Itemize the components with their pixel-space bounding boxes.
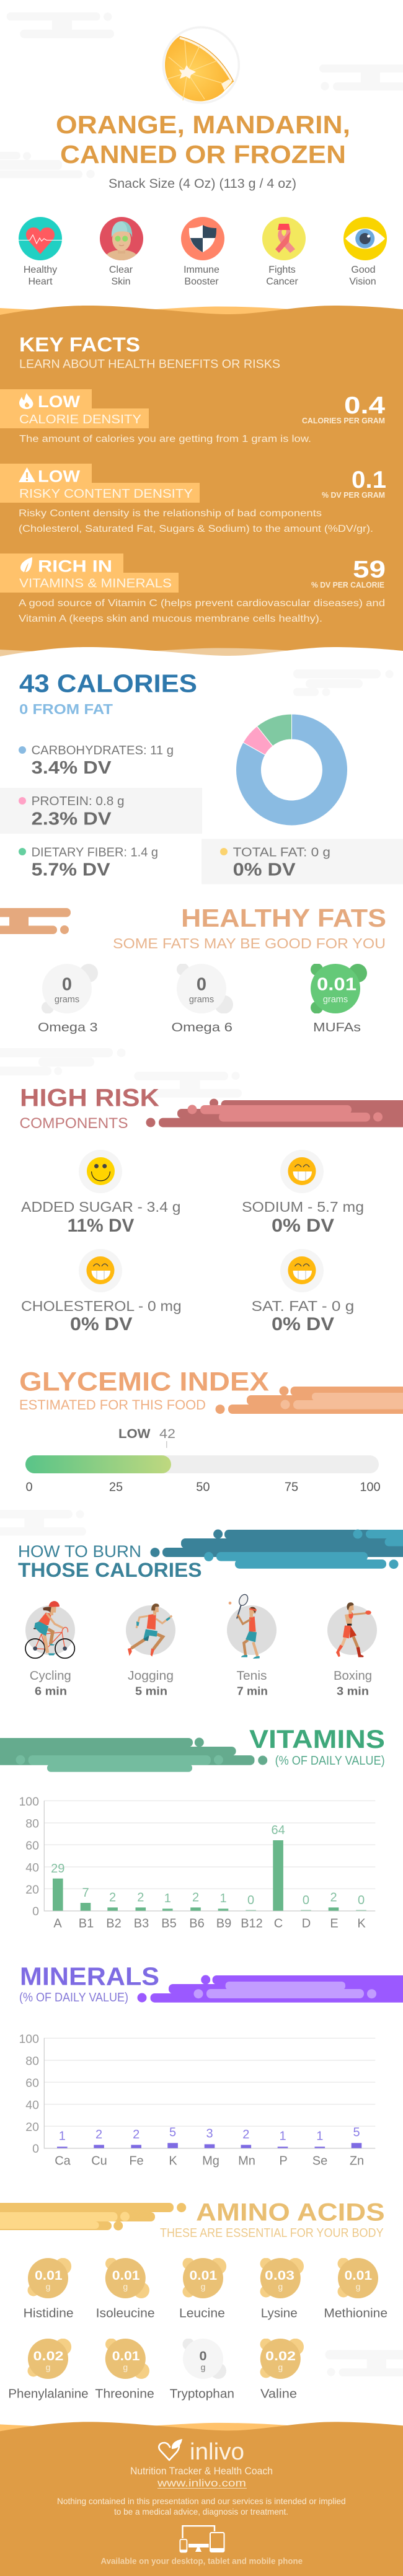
- chart: minerals bar chart: Se: [312, 2155, 327, 2168]
- icon: leaf: [20, 557, 32, 572]
- description: vitamins and minerals: A good source of Vitamin C (helps prevent cardiovascular diseases) and: [19, 598, 385, 609]
- risk item: cholesterol: [21, 1249, 182, 1334]
- amino acid: valine: 0.02: [265, 2349, 296, 2363]
- bubble: omega 6: grams: [189, 995, 214, 1005]
- metric: 0.1 % dv per gram: % DV PER GRAM: [322, 491, 385, 500]
- hero: orange slice image: [163, 27, 239, 103]
- chart: vitamins bar chart: B12: [241, 1917, 263, 1930]
- amino acid: threonine: 0.01: [112, 2349, 140, 2363]
- decorative band: amino acids: [0, 2203, 186, 2230]
- decorative band: burn: [150, 1530, 403, 1569]
- decorative band: minerals: [138, 1975, 403, 2003]
- chart: minerals bar chart: 60: [25, 2076, 39, 2090]
- chart: minerals bar chart: 0: [32, 2142, 39, 2156]
- fact: rich in vitamins and minerals: [0, 554, 386, 624]
- amino acid: lysine: g: [278, 2282, 283, 2291]
- exercise: cycling: [25, 1601, 75, 1698]
- amino acid: isoleucine: 0.01: [112, 2268, 140, 2283]
- amino acid: histidine: [27, 2258, 71, 2298]
- risk item: sodium: 0% DV: [272, 1215, 334, 1236]
- icon: good vision: [343, 217, 387, 260]
- exercise: jogging: [126, 1603, 175, 1698]
- chart: vitamins bar chart: B1: [79, 1917, 94, 1930]
- chart: vitamins bar chart: 80: [25, 1817, 39, 1831]
- icon: immune booster: [181, 217, 224, 260]
- chart: minerals bar chart: 80: [25, 2054, 39, 2068]
- amino acid: tryptophan: [182, 2338, 226, 2379]
- amino acid: histidine: g: [46, 2282, 50, 2291]
- decorative band: glycemic: [216, 1386, 403, 1414]
- metric: 59 % dv per calorie: % DV PER CALORIE: [311, 581, 384, 589]
- legend: protein: [0, 788, 202, 834]
- logo: inlivo heart and wordmark: inlivo: [190, 2439, 244, 2465]
- chart: minerals bar chart: P: [279, 2155, 288, 2168]
- chart: macronutrient donut: [236, 714, 347, 826]
- title: CANNED OR FROZEN: [60, 140, 346, 169]
- gauge bar: [25, 1455, 379, 1473]
- metric: 0.4 calories per gram: [302, 392, 385, 425]
- rating: rich in: RICH IN: [38, 557, 112, 575]
- legend: dietary fiber: 5.7% DV: [32, 860, 110, 880]
- chart: vitamins bar chart: B2: [106, 1917, 122, 1930]
- label: calorie density: CALORIE DENSITY: [19, 412, 141, 426]
- chart: minerals bar chart: 20: [25, 2120, 39, 2134]
- chart: minerals bar chart: Ca: [55, 2155, 71, 2168]
- amino acid: valine: g: [278, 2362, 283, 2372]
- label: good vision: Good: [351, 265, 376, 275]
- chart: vitamins bar chart: 20: [25, 1883, 39, 1897]
- benefits row: [19, 217, 387, 287]
- metric: 0.4 calories per gram: CALORIES PER GRAM: [302, 417, 385, 425]
- panel: glycemic index: [19, 1367, 403, 1494]
- chart: minerals bar chart: 1: [279, 2130, 286, 2143]
- metric: 59 % dv per calorie: [311, 556, 386, 589]
- description: risky content density: (Cholesterol, Saturated Fat, Sugars & Sodium) to the amount (%DV/gr).: [19, 524, 373, 534]
- bubble: omega 3: grams: [55, 995, 79, 1005]
- exercise: boxing: Boxing: [334, 1669, 372, 1683]
- chart: vitamins bar chart: 1: [164, 1892, 171, 1905]
- amino acid: phenylalanine: 0.02: [33, 2349, 64, 2363]
- chart: vitamins bar chart: 64: [271, 1824, 285, 1837]
- chart: vitamins bar chart: 40: [25, 1861, 39, 1874]
- risk item: sodium: [242, 1150, 364, 1236]
- panel: minerals: [19, 1962, 403, 2168]
- title: ORANGE, MANDARIN,: [56, 110, 350, 139]
- legend: total fat: TOTAL FAT: 0 g: [233, 845, 330, 859]
- chart: vitamins bar chart: K: [357, 1917, 366, 1930]
- description: vitamins and minerals: [19, 598, 385, 624]
- bubble: omega 6: [171, 963, 233, 1034]
- chart: minerals bar chart: Cu: [91, 2155, 107, 2168]
- chart: vitamins bar chart: 2: [192, 1891, 199, 1905]
- legend: protein: PROTEIN: 0.8 g: [32, 795, 125, 808]
- amino acid: leucine: [182, 2257, 226, 2298]
- chart: minerals bar chart: 5: [169, 2126, 176, 2140]
- amino acid: isoleucine: g: [123, 2282, 128, 2291]
- exercise: tennis: Tenis: [237, 1669, 267, 1683]
- legend: protein: 2.3% DV: [32, 809, 112, 829]
- chart: vitamins bar chart: 0: [358, 1894, 365, 1907]
- chart: vitamins bar chart: [19, 1795, 375, 1930]
- chart: minerals bar chart: 5: [353, 2126, 360, 2140]
- amino acid: lysine: [260, 2257, 304, 2298]
- description: calorie density: The amount of calories you are getting from 1 gram is low.: [19, 434, 311, 444]
- heading: healthy fats: HEALTHY FATS: [181, 904, 386, 932]
- amino acid: lysine: 0.03: [265, 2268, 294, 2283]
- tagline: Nutrition Tracker & Health Coach: [130, 2466, 273, 2477]
- bubble: omega 3: [38, 964, 98, 1034]
- risk item: cholesterol: CHOLESTEROL - 0 mg: [21, 1298, 182, 1314]
- amino acid: valine: [260, 2338, 304, 2379]
- chart: vitamins bar chart: C: [274, 1917, 283, 1930]
- chart: vitamins bar chart: 1: [219, 1892, 227, 1905]
- panel: vitamins: [0, 1724, 385, 1930]
- gauge scale: 100: [360, 1481, 381, 1494]
- exercise: boxing: 3 min: [337, 1685, 369, 1698]
- label: healthy heart: Healthy: [24, 265, 57, 275]
- legend: total fat: 0% DV: [233, 860, 296, 880]
- legend: dietary fiber: [19, 845, 158, 880]
- icon: healthy heart: [19, 217, 62, 260]
- chart: vitamins bar chart: D: [302, 1917, 311, 1930]
- label: histidine: Histidine: [24, 2306, 74, 2320]
- risk item: sodium: SODIUM - 5.7 mg: [242, 1199, 364, 1215]
- subheading: vitamins: (% OF DAILY VALUE): [275, 1754, 385, 1768]
- fact: calorie density: [0, 389, 385, 444]
- chart: minerals bar chart: Fe: [129, 2155, 144, 2168]
- metric: 0.1 % dv per gram: [322, 467, 386, 500]
- serving size subtitle: Snack Size (4 Oz) (113 g / 4 oz): [108, 177, 296, 191]
- amino acid: isoleucine: [105, 2257, 149, 2298]
- background clouds: header: [0, 12, 403, 179]
- decorative band: high risk: [146, 1099, 403, 1127]
- gauge value: low 42: [118, 1427, 175, 1448]
- bubble: mufas: MUFAs: [313, 1020, 361, 1034]
- chart: vitamins bar chart: A: [53, 1917, 62, 1930]
- icon: warning: [19, 467, 35, 482]
- chart: minerals bar chart: 2: [95, 2128, 102, 2142]
- panel: key facts: [0, 306, 403, 659]
- rating: low: LOW: [38, 467, 81, 486]
- bubble: mufas: [311, 963, 367, 1034]
- legend: carbohydrates: 3.4% DV: [32, 758, 112, 778]
- chart: vitamins bar chart: 100: [19, 1795, 39, 1809]
- fact: risky content density: [0, 464, 386, 534]
- chart: minerals bar chart: Mn: [238, 2155, 255, 2168]
- label: phenylalanine: Phenylalanine: [8, 2388, 89, 2401]
- rating: low: LOW: [38, 392, 81, 411]
- chart: vitamins bar chart: 2: [109, 1891, 116, 1905]
- exercise: boxing: [327, 1602, 377, 1698]
- label: methionine: Methionine: [324, 2306, 388, 2320]
- chart: vitamins bar chart: 2: [330, 1891, 337, 1905]
- heading: minerals: MINERALS: [20, 1962, 159, 1991]
- gauge scale: 50: [196, 1481, 210, 1494]
- amino acid: leucine: 0.01: [190, 2268, 217, 2283]
- label: lysine: Lysine: [261, 2306, 298, 2320]
- chart: vitamins bar chart: 60: [25, 1839, 39, 1853]
- amino acid: methionine: g: [356, 2282, 360, 2291]
- subheading: healthy fats: SOME FATS MAY BE GOOD FOR YOU: [113, 935, 386, 951]
- heading: high risk: HIGH RISK: [20, 1084, 159, 1111]
- exercise: tennis: 7 min: [237, 1685, 268, 1698]
- amino acid: threonine: g: [123, 2362, 128, 2372]
- label: valine: Valine: [260, 2388, 297, 2401]
- chart: minerals bar chart: K: [169, 2155, 177, 2168]
- chart: vitamins bar chart: 0: [32, 1905, 39, 1918]
- label: threonine: Threonine: [95, 2388, 154, 2401]
- gauge scale: 75: [285, 1481, 298, 1494]
- panel: high risk components: [0, 1048, 403, 1334]
- icon: fights cancer: [262, 217, 306, 260]
- legend: carbohydrates: CARBOHYDRATES: 11 g: [32, 744, 174, 757]
- decorative band: healthy fats: [0, 908, 71, 934]
- amino acid: tryptophan: g: [201, 2362, 205, 2372]
- chart: vitamins bar chart: 7: [82, 1886, 89, 1900]
- subheading: 0 from fat: 0 FROM FAT: [19, 701, 113, 717]
- heading: vitamins: VITAMINS: [249, 1724, 385, 1753]
- chart: minerals bar chart: 1: [316, 2130, 323, 2143]
- legend: total fat: [202, 839, 403, 884]
- bubble: mufas: grams: [323, 995, 348, 1005]
- label: risky content density: RISKY CONTENT DENSITY: [19, 487, 193, 501]
- label: isoleucine: Isoleucine: [96, 2306, 155, 2320]
- label: vitamins and minerals: VITAMINS & MINERALS: [19, 576, 172, 590]
- label: good vision: Vision: [349, 276, 376, 287]
- gauge value: low 42: 42: [159, 1427, 175, 1441]
- chart: vitamins bar chart: B3: [134, 1917, 149, 1930]
- description: risky content density: Risky Content density is the relationship of bad components: [19, 508, 322, 519]
- disclaimer: [57, 2496, 346, 2516]
- bubble: omega 6: Omega 6: [171, 1020, 232, 1034]
- metric: 0.4 calories per gram: 0.4: [344, 392, 385, 419]
- label: fights cancer: Cancer: [266, 276, 298, 287]
- metric: 59 % dv per calorie: 59: [353, 556, 386, 583]
- disclaimer: to be a medical advice, diagnosis or treatment.: [114, 2507, 288, 2516]
- decorative band: vitamins: [0, 1738, 267, 1772]
- subheading: components: COMPONENTS: [20, 1115, 128, 1132]
- legend: carbohydrates: [19, 744, 174, 778]
- chart: minerals bar chart: Mg: [202, 2155, 219, 2168]
- exercise: cycling: Cycling: [30, 1669, 71, 1683]
- amino acid: tryptophan: 0: [200, 2349, 207, 2363]
- risk item: saturated fat: SAT. FAT - 0 g: [252, 1298, 354, 1314]
- gauge scale: [25, 1481, 381, 1494]
- chart: minerals bar chart: 100: [19, 2032, 39, 2046]
- label: immune booster: Booster: [184, 276, 219, 287]
- exercise: cycling: 6 min: [35, 1685, 67, 1698]
- heading: amino acids: AMINO ACIDS: [196, 2199, 385, 2226]
- chart: vitamins bar chart: B6: [189, 1917, 205, 1930]
- panel: amino acids: [0, 2199, 403, 2401]
- panel: how to burn calories: [0, 1510, 403, 1698]
- chart: vitamins bar chart: E: [330, 1917, 339, 1930]
- heading: glycemic index: GLYCEMIC INDEX: [19, 1367, 269, 1397]
- chart: vitamins bar chart: 0: [303, 1894, 309, 1907]
- panel: healthy fats: [0, 904, 386, 1034]
- chart: minerals bar chart: 40: [25, 2099, 39, 2112]
- amino acid: threonine: [105, 2338, 149, 2379]
- risk item: added sugar: [21, 1150, 181, 1236]
- risk item: saturated fat: 0% DV: [272, 1314, 334, 1334]
- chart: vitamins bar chart: B9: [216, 1917, 231, 1930]
- heading: those calories: THOSE CALORIES: [18, 1559, 202, 1581]
- gauge value: low 42: LOW: [118, 1427, 151, 1441]
- subheading: key facts: LEARN ABOUT HEALTH BENEFITS OR RISKS: [19, 358, 280, 371]
- gauge scale: 25: [109, 1481, 123, 1494]
- chart: minerals bar chart: Zn: [350, 2155, 364, 2168]
- exercise: jogging: 5 min: [135, 1685, 167, 1698]
- footer: [0, 2422, 403, 2576]
- amino acid: leucine: g: [201, 2282, 205, 2291]
- label: healthy heart: Heart: [28, 276, 53, 287]
- description: vitamins and minerals: Vitamin A (keeps skin and mucous membrane cells healthy).: [19, 614, 322, 624]
- bubble: omega 3: Omega 3: [38, 1020, 98, 1034]
- amino acid: methionine: 0.01: [345, 2268, 372, 2283]
- bubble: omega 3: 0: [62, 975, 72, 995]
- risk item: added sugar: 11% DV: [68, 1215, 135, 1236]
- label: fights cancer: Fights: [268, 265, 296, 275]
- chart: minerals bar chart: 2: [242, 2128, 249, 2142]
- description: risky content density: [19, 508, 373, 534]
- icon: clear skin: [100, 217, 143, 260]
- risk item: cholesterol: 0% DV: [70, 1314, 133, 1334]
- panel: calories: [0, 669, 403, 884]
- risk item: added sugar: ADDED SUGAR - 3.4 g: [21, 1199, 181, 1215]
- heading: key facts: KEY FACTS: [19, 333, 140, 356]
- icon: flame: [19, 393, 33, 409]
- chart: vitamins bar chart: 2: [137, 1891, 144, 1905]
- amino acid: phenylalanine: g: [46, 2362, 50, 2372]
- chart: minerals bar chart: 1: [59, 2130, 66, 2143]
- subheading: estimated: ESTIMATED FOR THIS FOOD: [19, 1397, 206, 1413]
- subheading: minerals: (% OF DAILY VALUE): [19, 1991, 128, 2005]
- website link: www.inlivo.com: [157, 2477, 246, 2489]
- amino acid: phenylalanine: [27, 2339, 71, 2379]
- heading: how to burn: HOW TO BURN: [18, 1542, 141, 1561]
- label: immune booster: Immune: [184, 265, 219, 275]
- chart: minerals bar chart: 2: [133, 2128, 140, 2142]
- exercise: tennis: [227, 1593, 277, 1698]
- title: [56, 110, 350, 169]
- chart: vitamins bar chart: 0: [247, 1894, 254, 1907]
- disclaimer: Nothing contained in this presentation and our services is intended or implied: [57, 2496, 346, 2506]
- metric: 0.1 % dv per gram: 0.1: [352, 467, 386, 493]
- label: tryptophan: Tryptophan: [170, 2388, 234, 2401]
- amino acid: methionine: [337, 2257, 378, 2298]
- legend: dietary fiber: DIETARY FIBER: 1.4 g: [32, 845, 158, 859]
- heading: 43 calories: 43 CALORIES: [19, 669, 197, 698]
- label: clear skin: Clear: [109, 265, 133, 275]
- amino acid: histidine: 0.01: [35, 2268, 63, 2283]
- bubble: omega 6: 0: [197, 975, 206, 995]
- chart: minerals bar chart: 3: [206, 2127, 213, 2141]
- bubble: mufas: 0.01: [317, 975, 356, 995]
- icon: devices: [180, 2526, 224, 2552]
- chart: vitamins bar chart: B5: [161, 1917, 177, 1930]
- risk item: saturated fat: [252, 1249, 354, 1334]
- gauge scale: 0: [25, 1481, 33, 1494]
- label: leucine: Leucine: [179, 2306, 225, 2320]
- availability note: Available on your desktop, tablet and mobile phone: [100, 2556, 303, 2566]
- logo: inlivo heart and wordmark: [159, 2439, 244, 2465]
- chart: minerals bar chart: [19, 2032, 375, 2168]
- chart: vitamins bar chart: 29: [51, 1862, 64, 1876]
- label: clear skin: Skin: [111, 276, 131, 287]
- exercise: jogging: Jogging: [128, 1669, 174, 1683]
